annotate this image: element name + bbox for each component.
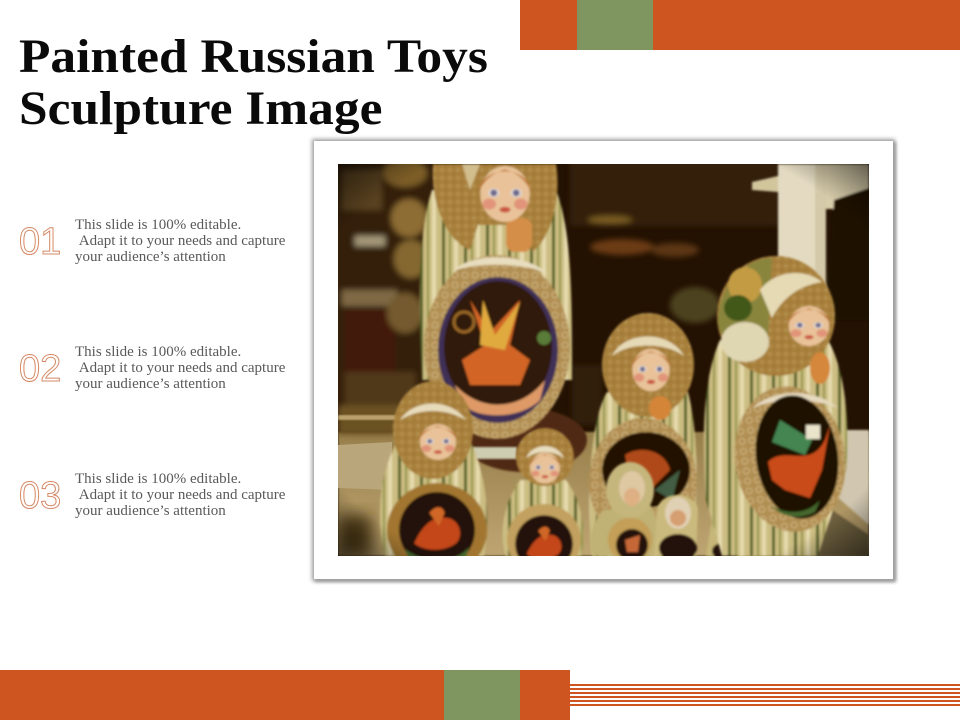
item 02 text: your audience’s attention [75,376,226,392]
large right doll [704,256,855,556]
item 01 text: your audience’s attention [75,249,226,265]
item 03 text: Adapt it to your needs and capture [79,487,285,503]
item 02 text [75,344,285,392]
item 02 text: This slide is 100% editable. [75,344,241,360]
title: Sculpture Image [19,83,382,135]
photo: painted nesting dolls [338,164,869,556]
white column [752,164,869,320]
title: Painted Russian Toys [19,31,488,83]
item 01 text [75,217,285,265]
title [19,31,488,135]
center small doll [503,428,583,576]
front tiny dolls [590,462,762,562]
top bar green block [577,0,653,50]
photo background [330,159,869,556]
picture frame [314,141,893,579]
table [338,432,869,556]
item 03 text [75,471,285,519]
bottom decorative bar [0,670,570,720]
item 01 text: Adapt it to your needs and capture [79,233,285,249]
item 03 text: your audience’s attention [75,503,226,519]
item 03 text: This slide is 100% editable. [75,471,241,487]
big doll [420,164,572,439]
left small doll [380,381,487,577]
item 02 text: Adapt it to your needs and capture [79,360,285,376]
middle right doll [589,313,697,556]
photo warm tint and vignette [338,164,869,556]
bottom bar green block [444,670,520,720]
item 01 text: This slide is 100% editable. [75,217,241,233]
top decorative bar [520,0,960,50]
bottom decorative stripes [570,684,960,706]
